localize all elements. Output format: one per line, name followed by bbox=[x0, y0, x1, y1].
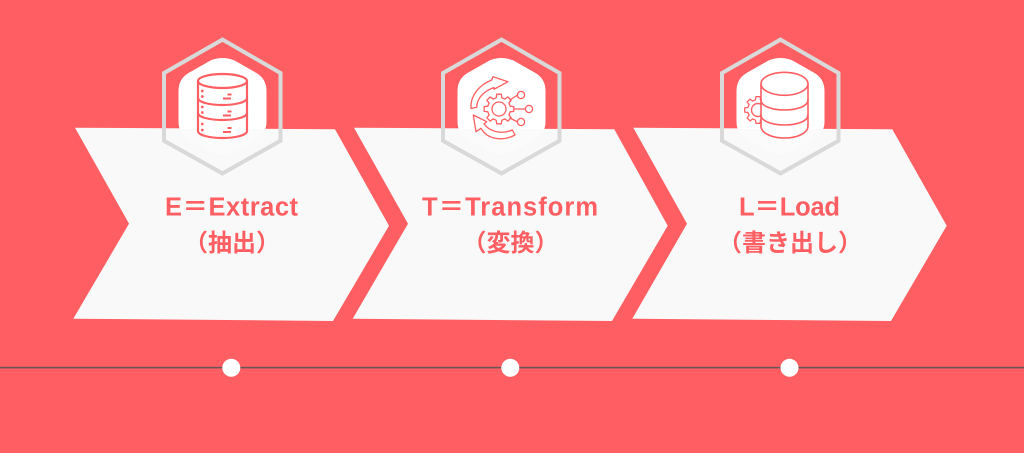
panel: transform bbox=[353, 40, 668, 321]
panel: extract bbox=[73, 40, 389, 321]
chevron: transform bbox=[353, 128, 668, 321]
subheading: load: （書き出し） bbox=[718, 230, 862, 257]
chevron: load bbox=[632, 128, 947, 321]
subheading: extract: （抽出） bbox=[184, 230, 280, 257]
timeline dot: load bbox=[780, 359, 798, 377]
timeline dot: transform bbox=[501, 359, 519, 377]
hexagon badge: load bbox=[722, 40, 838, 173]
timeline line bbox=[0, 367, 1024, 368]
panel: load bbox=[632, 40, 947, 321]
icon: database with gear bbox=[745, 72, 808, 138]
heading: load: L＝Load bbox=[739, 194, 840, 222]
heading: extract: E＝Extract bbox=[165, 194, 298, 222]
icon: database server bbox=[198, 74, 247, 138]
timeline dot: extract bbox=[222, 359, 240, 377]
heading: transform: T＝Transform bbox=[422, 194, 598, 222]
hexagon badge: transform bbox=[443, 40, 560, 173]
chevron: extract bbox=[73, 128, 389, 321]
icon: transform gear and arrows bbox=[471, 77, 533, 139]
hexagon badge: extract bbox=[164, 40, 280, 173]
timeline bbox=[0, 359, 1024, 377]
subheading: transform: （変換） bbox=[462, 230, 558, 257]
